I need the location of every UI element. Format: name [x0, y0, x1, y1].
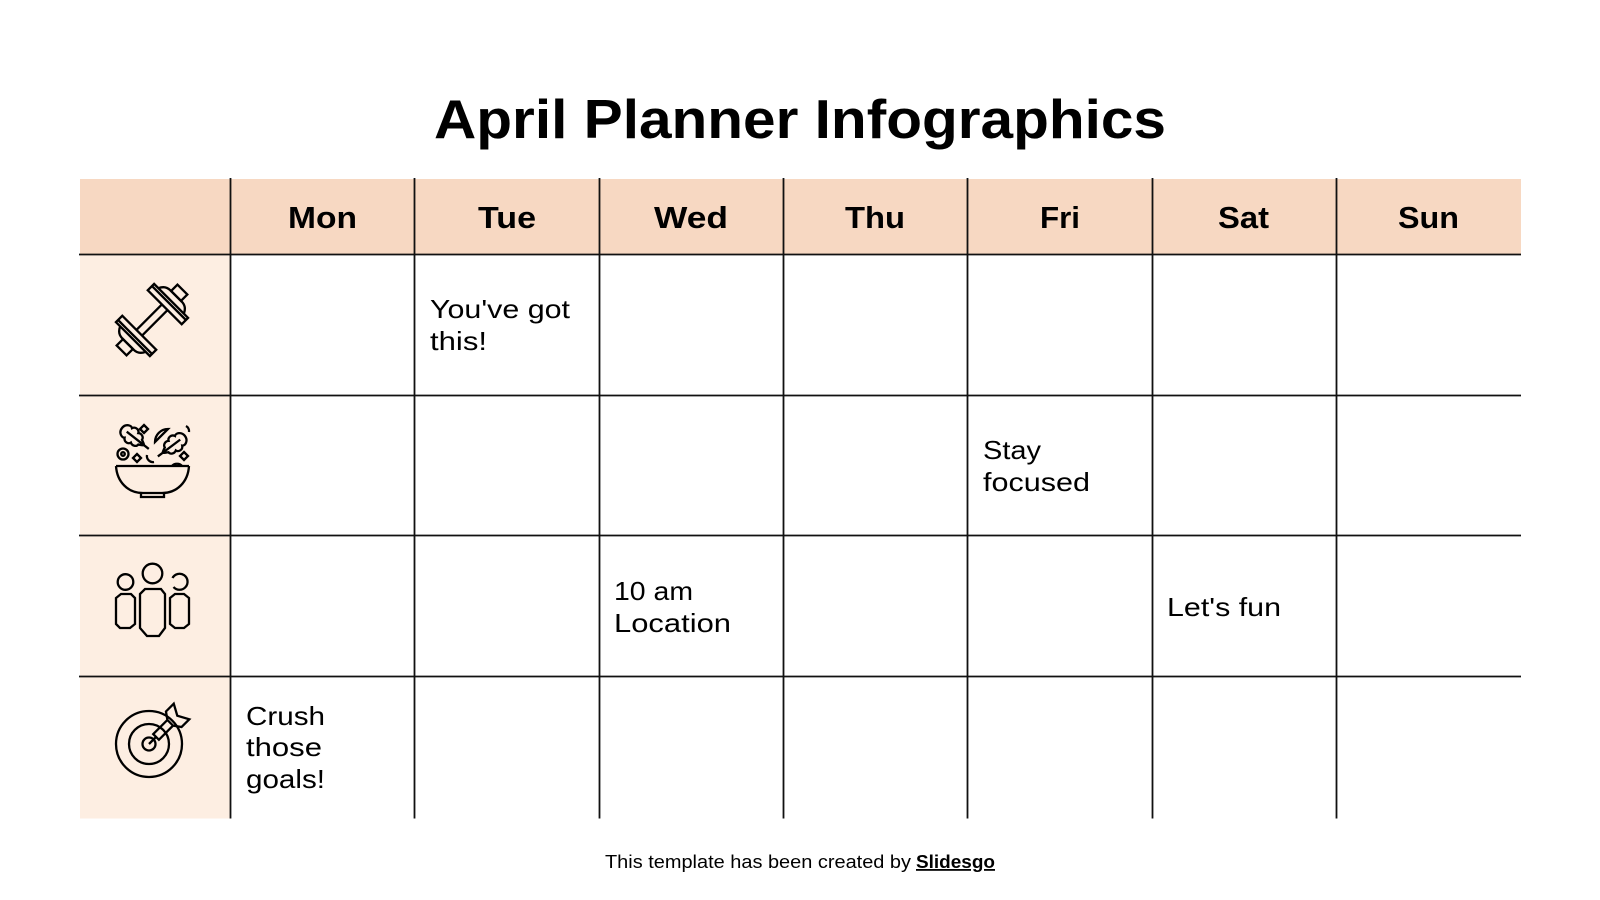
cell: crush those goals: goals!: [246, 764, 325, 794]
footer credit: This template has been created by: [605, 852, 911, 872]
footer credit: Slidesgo: [916, 852, 995, 872]
icon: dumbbell: [105, 273, 199, 367]
header band: [80, 179, 1521, 254]
cell: 10 am location: Location: [614, 608, 731, 638]
cell: crush those goals: Crush: [246, 701, 325, 731]
weekday headers: Sat: [1218, 200, 1269, 235]
weekday headers: Thu: [845, 200, 905, 235]
icon: target with arrow: [116, 704, 189, 777]
title: April Planner Infographics: [434, 88, 1166, 150]
weekday headers: Mon: [288, 200, 357, 235]
cell: let's fun: Let's fun: [1167, 592, 1281, 622]
planner table: [79, 178, 1521, 818]
cell: stay focused: focused: [983, 467, 1090, 497]
cell: 10 am location: [614, 576, 731, 638]
cell: you've got this: You've got: [430, 294, 571, 324]
icon: team of people: [116, 564, 189, 636]
cell: stay focused: Stay: [983, 435, 1041, 465]
cell: you've got this: [430, 294, 571, 356]
weekday headers: Tue: [478, 200, 536, 235]
icon column: [80, 254, 230, 818]
cell: stay focused: [983, 435, 1090, 497]
cell: crush those goals: those: [246, 732, 322, 762]
cell: you've got this: this!: [430, 326, 487, 356]
weekday headers: Fri: [1040, 200, 1080, 235]
cell: crush those goals: [246, 701, 325, 794]
weekday headers: Sun: [1398, 200, 1459, 235]
icon: salad bowl: [116, 421, 190, 497]
weekday headers: Wed: [654, 200, 728, 235]
weekday headers: [288, 200, 1459, 235]
cell: 10 am location: 10 am: [614, 576, 693, 606]
